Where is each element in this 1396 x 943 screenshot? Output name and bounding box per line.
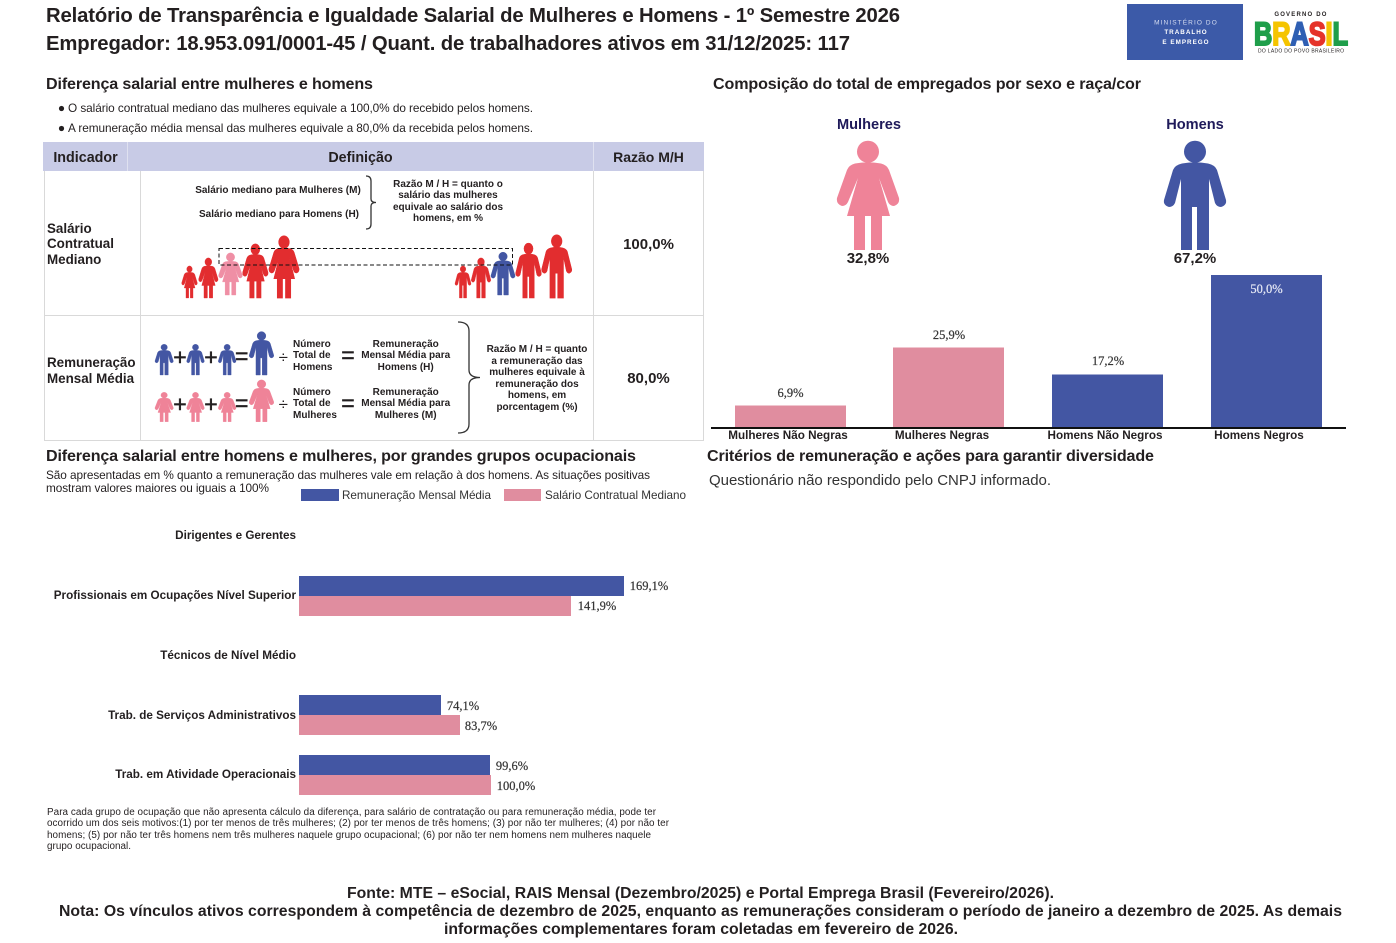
formula: homens: = (235, 343, 248, 369)
text block: questionário: Questionário não respondido pelo CNPJ informado. (709, 472, 1051, 489)
formula: mulheres: = (235, 390, 248, 416)
definition: salário mediano: Salário mediano para Homens (H) (199, 209, 359, 220)
definition: salário mediano: equivale ao salário dos (393, 202, 503, 213)
formula: homens: Total de (293, 350, 331, 361)
group: atividade operacionais (115, 755, 535, 795)
bar: mulheres negras: Mulheres Negras (895, 429, 990, 442)
footnote: grupo ocupacional. (47, 841, 131, 852)
pictogram: homens (1164, 117, 1226, 267)
formula: homens: Número (293, 339, 331, 350)
text block: explicação do gráfico (46, 468, 650, 495)
logo: Ministério do Trabalho e Emprego: E EMPREGO (1162, 39, 1210, 46)
heading: grupos ocupacionais: Diferença salarial entre homens e mulheres, por grandes grupos ocupacionais (46, 447, 636, 465)
source note: Fonte: MTE – eSocial, RAIS Mensal (Dezembro/2025) e Portal Emprega Brasil (Fevereiro/2026). (347, 885, 1054, 902)
source note: informações complementares foram coletadas em fevereiro de 2026. (444, 921, 958, 938)
pictogram: mulheres: 32,8% (847, 250, 889, 267)
table grid (44, 171, 704, 441)
formula: homens: + (204, 344, 218, 370)
group: serviços administrativos: 74,1% (447, 699, 479, 713)
bar: mulheres negras: 25,9% (933, 328, 965, 342)
formula: mulheres: = (341, 390, 355, 416)
text block: explicação do gráfico: mostram valores maiores ou iguais a 100% (46, 481, 270, 495)
row label: remuneração mensal média (47, 355, 136, 386)
pictogram: mulheres: Mulheres (837, 117, 901, 133)
formula: mulheres: Mulheres (M) (375, 410, 437, 421)
formula: mulheres: ÷ (279, 395, 288, 414)
formula: mulheres: Remuneração (373, 387, 439, 398)
group: serviços administrativos (108, 695, 497, 735)
group: atividade operacionais: 100,0% (497, 779, 535, 793)
group: profissionais nível superior (54, 576, 668, 616)
logo: Ministério do Trabalho e Emprego (1127, 4, 1243, 60)
group: serviços administrativos: 83,7% (465, 719, 497, 733)
bar: homens não negros (1048, 354, 1163, 442)
footnote (47, 807, 670, 852)
heading: composição: Composição do total de empregados por sexo e raça/cor (713, 75, 1142, 93)
bar: homens negros (1211, 275, 1322, 442)
row label: salário contratual mediano: Salário (47, 221, 92, 236)
text block: resumo: A remuneração média mensal das mulheres equivale a 80,0% da recebida pelos homens. (68, 121, 533, 135)
brace and ratio definition: mulheres equivale à (489, 367, 585, 378)
title: Empregador: 18.953.091/0001-45 / Quant. de trabalhadores ativos em 31/12/2025: 117 (46, 33, 850, 55)
definition: salário mediano (195, 176, 503, 229)
group: dirigentes e gerentes: Dirigentes e Gerentes (175, 529, 296, 542)
table header: Indicador (53, 150, 118, 166)
pictogram: homens: 67,2% (1174, 250, 1216, 267)
text block: resumo (59, 101, 533, 135)
formula: homens: Homens (293, 362, 333, 373)
footnote: homens; (5) por não ter três homens nem três mulheres naquele grupo ocupacional; (6) por não ter nem homens nem mulheres naquele (47, 830, 652, 841)
legend: Salário Contratual Mediano (545, 489, 686, 502)
row label: remuneração mensal média: Mensal Média (47, 371, 135, 386)
table header: Definição (328, 150, 393, 166)
definition: salário mediano: homens, em % (413, 213, 483, 224)
row label: remuneração mensal média: Remuneração (47, 355, 136, 370)
brace and ratio definition: homens, em (508, 390, 566, 401)
formula: mulheres: Mensal Média para (361, 398, 451, 409)
group: profissionais nível superior: 141,9% (578, 599, 616, 613)
definition: salário mediano: salário das mulheres (398, 190, 498, 201)
formula: mulheres: Mulheres (293, 410, 337, 421)
table header: Razão M/H (613, 149, 684, 165)
row value: 100,0%: 100,0% (623, 236, 674, 253)
logo: Ministério do Trabalho e Emprego: MINISTÉRIO DO (1154, 18, 1218, 26)
formula: mulheres: + (204, 391, 218, 417)
row label: salário contratual mediano: Mediano (47, 252, 101, 267)
bar: mulheres negras (893, 328, 1004, 442)
panel: tabela indicador (43, 142, 704, 441)
group: técnicos de nível médio: Técnicos de Nível Médio (160, 649, 296, 662)
bar: homens negros: Homens Negros (1214, 429, 1304, 442)
formula: homens: ÷ (279, 348, 288, 367)
logo: Governo do Brasil: GOVERNO DO (1274, 12, 1328, 18)
pictogram: mulheres (837, 117, 901, 267)
bar chart: composição por raça/cor (711, 275, 1346, 442)
heading: critérios: Critérios de remuneração e ações para garantir diversidade (707, 447, 1154, 465)
formula: homens: = (341, 342, 355, 368)
logo: Ministério do Trabalho e Emprego: TRABALHO (1164, 29, 1208, 36)
brace and ratio definition: Razão M / H = quanto (487, 344, 587, 355)
footnote: ocorrido um dos seis motivos:(1) por ter menos de três mulheres; (2) por ter menos de três homens; (3) por não ter mulheres; (4) por não ter (47, 818, 670, 829)
formula: mulheres: Total de (293, 398, 331, 409)
bar: mulheres não negras: Mulheres Não Negras (728, 429, 848, 442)
row value: 80,0%: 80,0% (627, 370, 670, 387)
formula: homens (155, 332, 451, 375)
bar: homens não negros: Homens Não Negros (1048, 429, 1163, 442)
dashed median box (219, 248, 512, 265)
brace and ratio definition: remuneração dos (495, 379, 579, 390)
pictogram: homens: Homens (1166, 117, 1224, 133)
bar: homens negros: 50,0% (1250, 282, 1283, 296)
group: atividade operacionais: Trab. em Atividade Operacionais (115, 768, 296, 781)
definition: salário mediano: Razão M / H = quanto o (393, 179, 503, 190)
row label: salário contratual mediano: Contratual (47, 236, 114, 251)
bar: mulheres não negras: 6,9% (777, 386, 804, 400)
group: profissionais nível superior: 169,1% (630, 579, 668, 593)
heading: diferença salarial: Diferença salarial entre mulheres e homens (46, 75, 373, 93)
bar chart: grupos ocupacionais (54, 529, 668, 795)
formula: homens: Mensal Média para (361, 350, 451, 361)
text block: resumo: O salário contratual mediano das mulheres equivale a 100,0% do recebido pelos homens. (68, 101, 533, 115)
logo: Governo do Brasil: BRASIL (1254, 16, 1348, 52)
table header (43, 142, 704, 171)
formula: homens: Homens (H) (378, 362, 434, 373)
formula: homens: Remuneração (373, 339, 439, 350)
brace and ratio definition (458, 322, 587, 433)
brace and ratio definition: a remuneração das (491, 356, 583, 367)
group: atividade operacionais: 99,6% (496, 759, 528, 773)
formula: homens: + (173, 344, 187, 370)
logo: Governo do Brasil: DO LADO DO POVO BRASILEIRO (1258, 48, 1344, 54)
title (46, 5, 900, 55)
text block: explicação do gráfico: São apresentadas em % quanto a remuneração das mulheres vale em relação à dos homens. As situações positivas (46, 468, 650, 482)
formula: mulheres (155, 380, 451, 422)
group: profissionais nível superior: Profissionais em Ocupações Nível Superior (54, 589, 296, 602)
formula: mulheres: Número (293, 387, 331, 398)
icons: mulheres em fila (182, 236, 299, 298)
bar: homens não negros: 17,2% (1092, 354, 1124, 368)
group: serviços administrativos: Trab. de Serviços Administrativos (108, 709, 296, 722)
formula: mulheres: + (173, 391, 187, 417)
icons: homens em fila (455, 235, 572, 298)
title: Relatório de Transparência e Igualdade Salarial de Mulheres e Homens - 1º Semestre 2026 (46, 5, 900, 27)
brace and ratio definition: porcentagem (%) (496, 402, 578, 413)
source note (59, 885, 1342, 938)
legend (301, 489, 686, 502)
footnote: Para cada grupo de ocupação que não apresenta cálculo da diferença, para salário de contratação ou para remuneração média, pode ter (47, 807, 657, 818)
definition: salário mediano: Salário mediano para Mulheres (M) (195, 185, 361, 196)
source note: Nota: Os vínculos ativos correspondem à competência de dezembro de 2025, enquanto as remunerações consideram o período de janeiro a dezembro de 2025. As demais (59, 903, 1342, 920)
row label: salário contratual mediano (47, 221, 114, 267)
bar: mulheres não negras (728, 386, 848, 442)
legend: Remuneração Mensal Média (342, 489, 491, 502)
